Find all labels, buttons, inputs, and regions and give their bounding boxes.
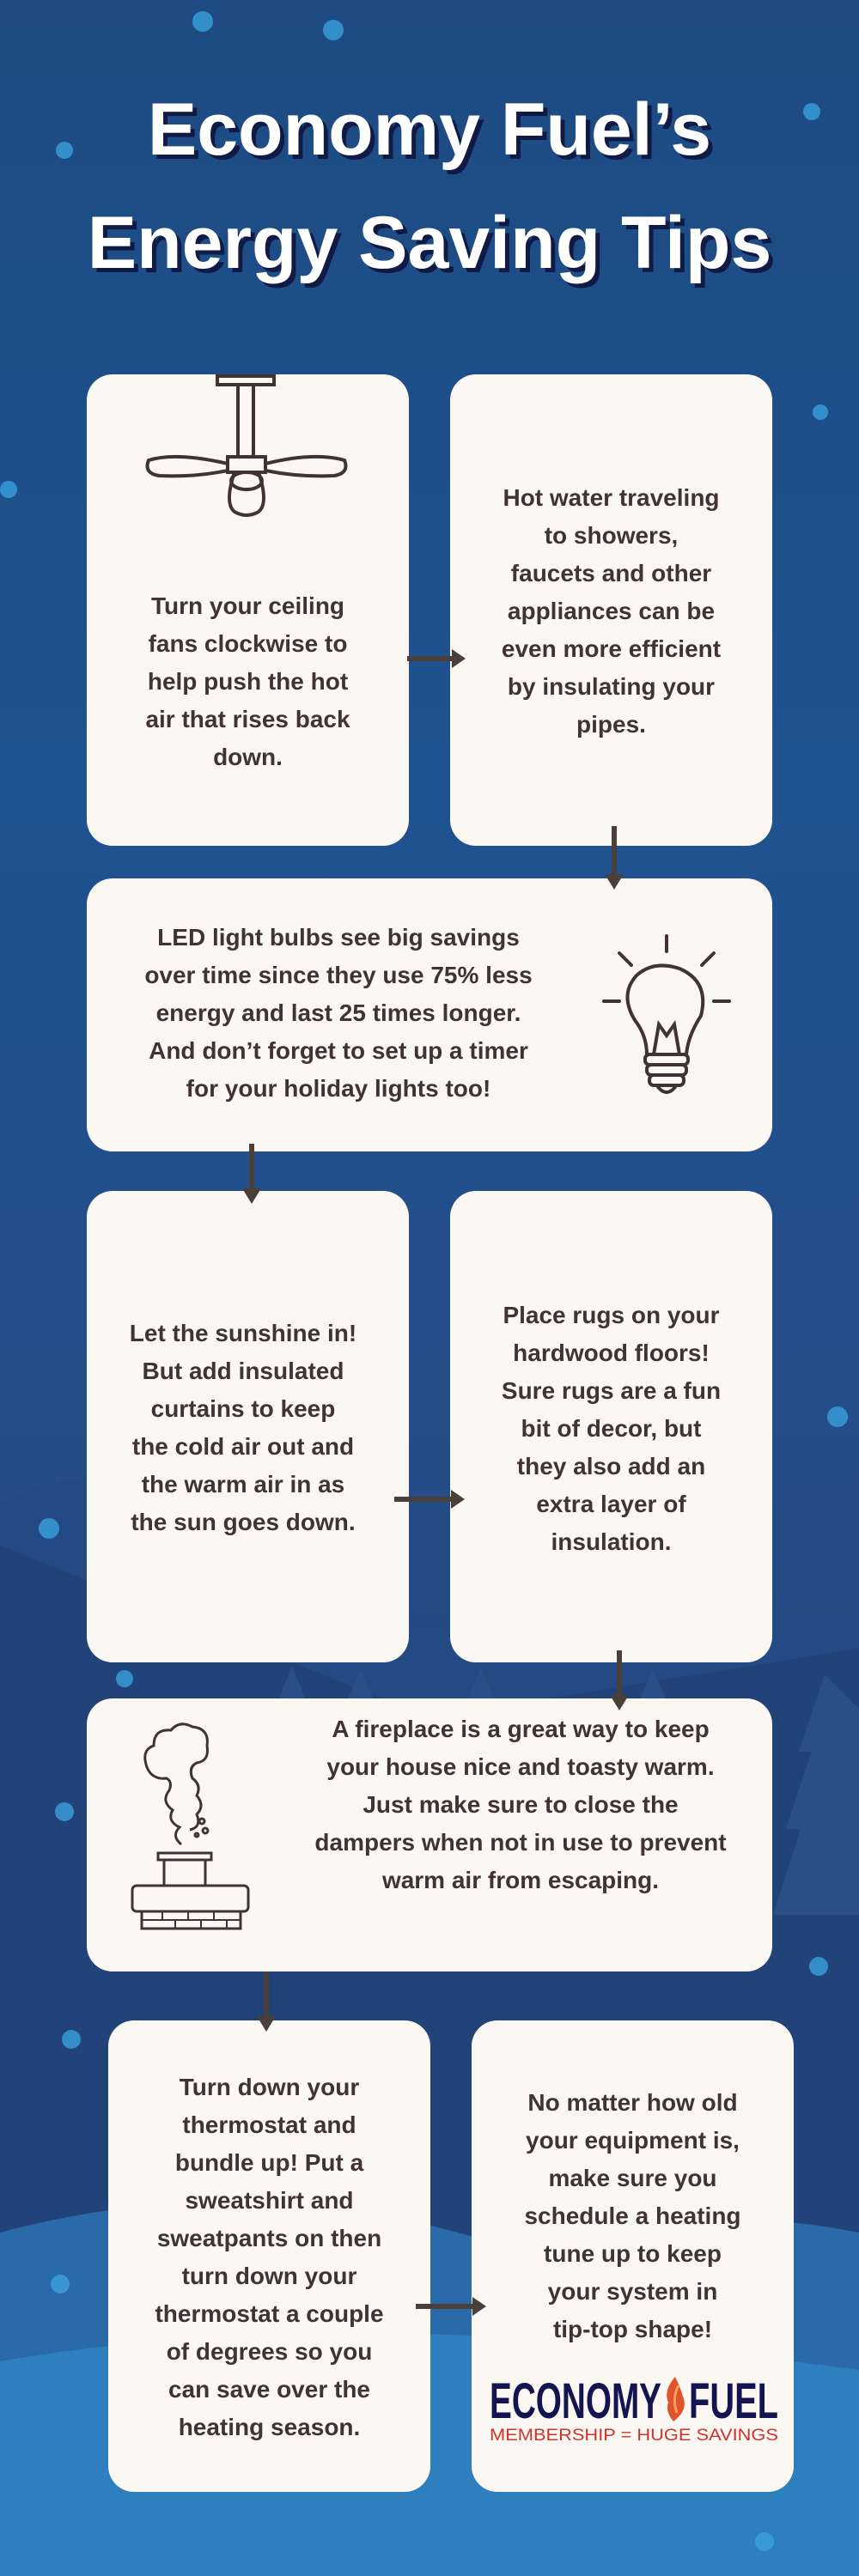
- text: pipes: to showers,: [545, 522, 678, 549]
- arrow: [407, 649, 466, 668]
- text: fireplace: dampers when not in use to prevent: [314, 1829, 727, 1856]
- panel: insulate pipes: [450, 374, 772, 846]
- text: ceiling fans: fans clockwise to: [149, 630, 347, 657]
- arrow: [394, 1490, 465, 1509]
- text: pipes: faucets and other: [511, 560, 711, 586]
- text: curtains: curtains to keep: [151, 1395, 335, 1422]
- arrow: [605, 826, 624, 890]
- panel: fireplace: [87, 1698, 772, 1971]
- text: thermostat: Turn down your: [180, 2074, 359, 2100]
- text: LED: energy and last 25 times longer.: [156, 999, 521, 1026]
- text: thermostat: [155, 2074, 384, 2440]
- text: thermostat: thermostat and: [182, 2111, 356, 2138]
- text: tune up: your system in: [548, 2278, 717, 2305]
- text: tune up: schedule a heating: [524, 2202, 741, 2229]
- text: thermostat: bundle up! Put a: [175, 2149, 363, 2176]
- text: rugs: Sure rugs are a fun: [502, 1377, 721, 1404]
- logo: Economy Fuel: [490, 2373, 778, 2445]
- text: pipes: [502, 484, 721, 738]
- text: fireplace: Just make sure to close the: [362, 1791, 679, 1818]
- panel: thermostat: [108, 2020, 430, 2492]
- title: Energy Saving Tips: [88, 202, 771, 284]
- text: pipes: appliances can be: [508, 598, 715, 624]
- text: fireplace: your house nice and toasty warm.: [326, 1753, 715, 1780]
- text: pipes: pipes.: [576, 711, 646, 738]
- arrow: [242, 1144, 261, 1204]
- text: rugs: insulation.: [551, 1528, 672, 1555]
- arrow: [610, 1650, 629, 1710]
- text: curtains: the cold air out and: [132, 1433, 354, 1460]
- title: [88, 88, 773, 289]
- text: LED: over time since they use 75% less: [144, 962, 533, 988]
- text: tune up: No matter how old: [527, 2089, 738, 2116]
- text: curtains: the sun goes down.: [131, 1509, 356, 1535]
- text: pipes: Hot water traveling: [503, 484, 720, 511]
- arrow: [257, 1971, 276, 2032]
- text: tune up: make sure you: [548, 2165, 717, 2191]
- icon: chimney: [131, 1722, 249, 1930]
- text: curtains: But add insulated: [143, 1358, 344, 1384]
- text: thermostat: turn down your: [182, 2263, 356, 2289]
- text: tune up: [524, 2089, 741, 2342]
- text: curtains: the warm air in as: [142, 1471, 344, 1498]
- text: fireplace: [314, 1716, 727, 1893]
- text: thermostat: thermostat a couple: [155, 2300, 384, 2327]
- text: pipes: by insulating your: [508, 673, 715, 700]
- text: LED: for your holiday lights too!: [186, 1075, 490, 1102]
- panel: ceiling fans: [87, 374, 409, 846]
- icon: ceiling fan: [146, 374, 347, 517]
- text: tune up: tip-top shape!: [553, 2316, 712, 2342]
- text: ceiling fans: help push the hot: [148, 668, 348, 695]
- text: curtains: Let the sunshine in!: [130, 1320, 356, 1346]
- text: ceiling fans: [145, 592, 350, 770]
- panel: rugs: [450, 1191, 772, 1662]
- text: rugs: [502, 1302, 721, 1555]
- logo: Economy Fuel: MEMBERSHIP = HUGE SAVINGS: [490, 2427, 778, 2445]
- text: thermostat: sweatshirt and: [185, 2187, 354, 2214]
- text: fireplace: A fireplace is a great way to keep: [332, 1716, 710, 1742]
- text: tune up: your equipment is,: [526, 2127, 740, 2154]
- panel: curtains: [87, 1191, 409, 1662]
- text: thermostat: sweatpants on then: [157, 2225, 381, 2251]
- panel: tune up: [472, 2020, 794, 2492]
- text: rugs: they also add an: [517, 1453, 705, 1479]
- logo: Economy Fuel: ECONOMY: [490, 2373, 661, 2429]
- text: rugs: bit of decor, but: [521, 1415, 701, 1442]
- text: tune up: tune up to keep: [544, 2240, 722, 2267]
- text: rugs: hardwood floors!: [513, 1340, 710, 1366]
- text: thermostat: of degrees so you: [167, 2338, 372, 2365]
- text: LED: And don’t forget to set up a timer: [149, 1037, 528, 1064]
- text: curtains: [130, 1320, 356, 1535]
- text: thermostat: heating season.: [179, 2414, 360, 2440]
- text: rugs: extra layer of: [536, 1491, 686, 1517]
- text: rugs: Place rugs on your: [503, 1302, 720, 1328]
- text: LED: LED light bulbs see big savings: [157, 924, 520, 951]
- arrow: [416, 2297, 486, 2316]
- text: ceiling fans: down.: [213, 744, 283, 770]
- text: LED: [144, 924, 533, 1102]
- text: fireplace: warm air from escaping.: [382, 1867, 659, 1893]
- panel: LED bulbs: [87, 878, 772, 1151]
- text: thermostat: can save over the: [168, 2376, 370, 2403]
- text: pipes: even more efficient: [502, 635, 721, 662]
- icon: light bulb: [602, 934, 731, 1094]
- text: ceiling fans: air that rises back: [145, 706, 350, 732]
- title: Economy Fuel’s: [148, 88, 711, 171]
- text: ceiling fans: Turn your ceiling: [151, 592, 344, 619]
